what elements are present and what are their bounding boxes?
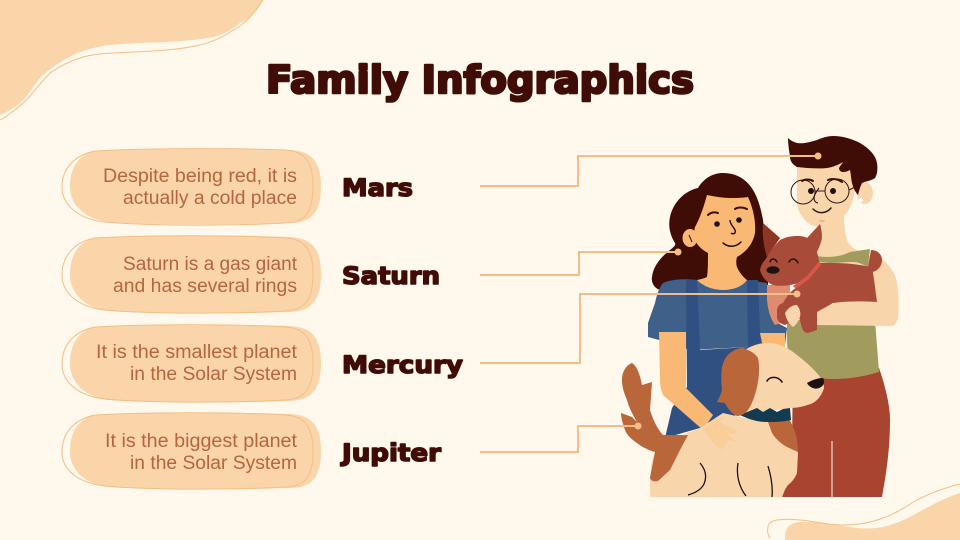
big dog: tail xyxy=(621,363,688,481)
title: Family Infographics xyxy=(266,58,694,102)
connector: Mars to man xyxy=(480,152,822,186)
red dog: hind leg xyxy=(868,250,882,272)
big dog xyxy=(621,343,824,497)
woman: sleeve edge and arm xyxy=(659,332,713,430)
man: hair xyxy=(788,136,877,195)
red dog: chest xyxy=(767,285,790,325)
red dog: collar xyxy=(793,261,821,289)
woman xyxy=(648,173,787,438)
woman: hair xyxy=(652,173,768,290)
text: Mars description: Despite being red, it is xyxy=(103,166,297,187)
text: Mars description: actually a cold place xyxy=(123,188,297,209)
label: Saturn: Saturn xyxy=(342,262,440,290)
big dog: body lines xyxy=(688,463,772,497)
man: face xyxy=(802,179,863,221)
text: Jupiter description: in the Solar System xyxy=(130,453,297,474)
red dog: body xyxy=(777,263,877,333)
panel: Saturn row xyxy=(62,236,440,313)
pill: Mercury description background xyxy=(62,325,321,402)
man: hand holding dog xyxy=(785,305,800,327)
man: shirt xyxy=(787,320,879,379)
pill: Jupiter description background xyxy=(62,413,321,489)
red dog: ear left xyxy=(763,223,780,257)
text: Mercury description: It is the smallest planet xyxy=(96,342,298,363)
big dog: collar xyxy=(740,408,791,422)
label: Jupiter: Jupiter xyxy=(340,439,441,467)
red dog: face xyxy=(766,259,798,274)
man: head xyxy=(797,160,855,227)
connector: Jupiter to big dog xyxy=(480,422,642,452)
woman: hand on dog xyxy=(703,417,739,450)
illustration: family with pets xyxy=(621,136,899,498)
man: trousers xyxy=(782,368,890,497)
big dog: ear xyxy=(717,348,759,416)
label: Mercury: Mercury xyxy=(342,351,463,379)
man: glasses xyxy=(791,179,855,204)
woman: top xyxy=(648,279,787,350)
woman: ear xyxy=(682,229,698,247)
panel: Mars row xyxy=(62,149,413,225)
woman: apron xyxy=(665,279,770,438)
decorative blob: top left corner xyxy=(0,0,263,120)
big dog: face xyxy=(767,377,824,389)
big dog: head xyxy=(722,343,824,415)
woman: facial features xyxy=(689,208,747,246)
big dog: back patch xyxy=(768,420,798,452)
text: Saturn description: and has several rings xyxy=(113,276,297,297)
connector: Saturn to woman xyxy=(480,248,682,275)
panel: Jupiter row xyxy=(62,413,441,489)
man: shirt collar xyxy=(817,249,870,267)
man: neck xyxy=(817,215,870,270)
woman: face xyxy=(694,195,755,295)
connector: Mercury to red dog xyxy=(480,290,800,363)
decorative blob: bottom right corner xyxy=(768,484,960,540)
text: Saturn description: Saturn is a gas giant xyxy=(123,254,298,275)
small red dog xyxy=(760,223,882,333)
label: Mars: Mars xyxy=(342,174,413,202)
pill: Mars description background xyxy=(62,149,321,225)
man xyxy=(782,136,899,498)
man: arm xyxy=(815,256,899,326)
big dog: body xyxy=(650,413,798,497)
pill: Saturn description background xyxy=(62,236,321,313)
text: Mercury description: in the Solar System xyxy=(130,364,297,385)
text: Jupiter description: It is the biggest planet xyxy=(105,431,298,452)
panel: Mercury row xyxy=(62,325,463,402)
man: ear xyxy=(857,182,873,204)
red dog: head xyxy=(760,224,822,286)
